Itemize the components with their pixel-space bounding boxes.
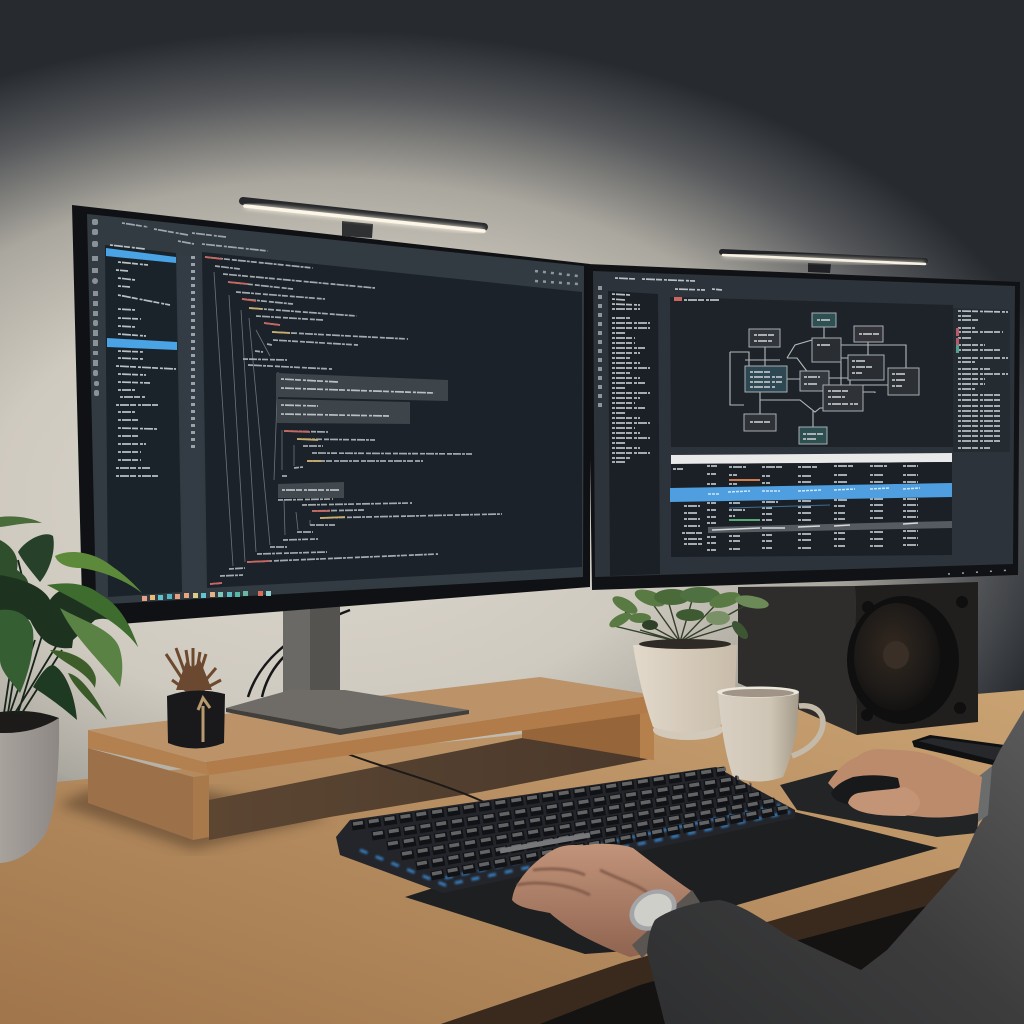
code lines (205, 257, 502, 584)
bar housing (722, 252, 925, 261)
typing hand with watch (512, 844, 700, 958)
sidebar panel (105, 245, 182, 597)
gutter icons (191, 256, 195, 450)
stems (610, 590, 755, 642)
pot (167, 690, 225, 748)
soil (639, 639, 731, 649)
cuff (978, 766, 992, 822)
leaf top tip (0, 516, 42, 527)
shadow around riser (57, 790, 330, 850)
gutter panel (178, 254, 205, 592)
watch case (622, 881, 684, 939)
left file panel (608, 291, 660, 576)
foliage (607, 586, 770, 642)
light glow (245, 206, 484, 231)
lower thin leaf (68, 673, 107, 720)
handle (792, 706, 823, 756)
phone (912, 735, 1012, 766)
sidebar file tree (110, 245, 176, 476)
desk surface (0, 690, 1024, 1024)
monitor bezel (587, 264, 1020, 590)
body (718, 688, 799, 782)
white table header bar (671, 453, 952, 464)
toolbar (615, 278, 722, 290)
tooltip two (277, 399, 410, 424)
highlighted leaf (60, 608, 122, 687)
taskbar dock icons (142, 591, 271, 601)
large desk pad (405, 812, 938, 954)
screen (593, 271, 1015, 577)
inspector list (958, 311, 1008, 448)
left monitor (72, 205, 590, 624)
hand (828, 749, 982, 818)
data table (671, 462, 952, 557)
top toolbar and tabs (122, 223, 268, 251)
left monitor light bar (243, 201, 484, 238)
diagram panel (670, 297, 953, 447)
rim (717, 686, 799, 698)
inspector accent blocks (956, 328, 959, 353)
top right window controls (535, 271, 578, 284)
side face (738, 586, 857, 735)
mouse (831, 775, 900, 805)
mug (717, 686, 823, 782)
header text (684, 299, 720, 301)
cone (847, 596, 959, 724)
key tops (353, 769, 788, 874)
lower dark leaf (33, 665, 77, 720)
clamp (808, 263, 831, 273)
speaker (738, 582, 978, 735)
cable on desk (345, 753, 484, 802)
grey selected row (708, 521, 952, 533)
right monitor light bar (722, 252, 925, 273)
key rows (352, 771, 787, 876)
tie (198, 698, 210, 742)
lower leaf (50, 650, 96, 688)
light glow (723, 255, 925, 264)
shadow under wooden riser (209, 738, 654, 840)
inside (722, 689, 794, 697)
lit upper leaf (47, 583, 138, 647)
spiky leaves (166, 648, 221, 695)
mouse hand (828, 749, 992, 822)
blue selected row (670, 483, 952, 502)
monitor stand (226, 600, 469, 735)
diagram node text (750, 320, 905, 439)
right inspector panel (953, 308, 1010, 452)
tooltip three (278, 482, 344, 498)
code syntax accents yellow (249, 308, 345, 518)
thumb (848, 787, 920, 816)
leaf bright (55, 552, 142, 593)
diagram nodes (744, 313, 919, 444)
stems (4, 560, 62, 713)
light strip (723, 255, 925, 264)
finger shading (517, 869, 650, 895)
cables behind stand (248, 610, 350, 697)
left icon rail (92, 219, 99, 396)
mouse pad (780, 770, 980, 837)
leaf left (0, 540, 28, 590)
wooden monitor riser (88, 677, 654, 840)
diagram header label (674, 297, 682, 301)
small black pot with spiky plant (166, 648, 225, 748)
left plant (0, 516, 142, 720)
screen (87, 214, 584, 604)
watch dial (628, 887, 678, 933)
big front leaf (0, 610, 33, 693)
back plant in white pot (607, 586, 770, 740)
blue glow (360, 805, 790, 885)
icon rail (598, 286, 602, 410)
hand (512, 844, 693, 957)
metal watch band (632, 890, 700, 958)
saucer (653, 720, 723, 740)
table bars (729, 480, 830, 520)
pot body (633, 645, 737, 732)
diagram connectors (730, 327, 906, 427)
space bar (500, 835, 590, 851)
light strip (245, 206, 484, 231)
monitor bezel (72, 205, 590, 624)
table text (673, 466, 918, 550)
right monitor (587, 264, 1020, 590)
code editor panel (202, 252, 582, 588)
sidebar highlighted rows (106, 248, 177, 350)
keyboard base (336, 767, 795, 893)
clamp (342, 221, 373, 238)
bar housing (243, 201, 484, 227)
keyboard (336, 767, 795, 893)
screw holes (861, 596, 968, 721)
leaf upper dark (18, 534, 54, 582)
dark mass (0, 575, 138, 648)
front face (855, 582, 978, 735)
large grey pot (0, 711, 59, 863)
indent guides (214, 272, 310, 566)
code syntax accents red (205, 257, 330, 584)
sleeved arm (647, 710, 1024, 1024)
file tree (612, 294, 650, 462)
status dots (948, 570, 1012, 574)
tooltip one (276, 373, 448, 401)
